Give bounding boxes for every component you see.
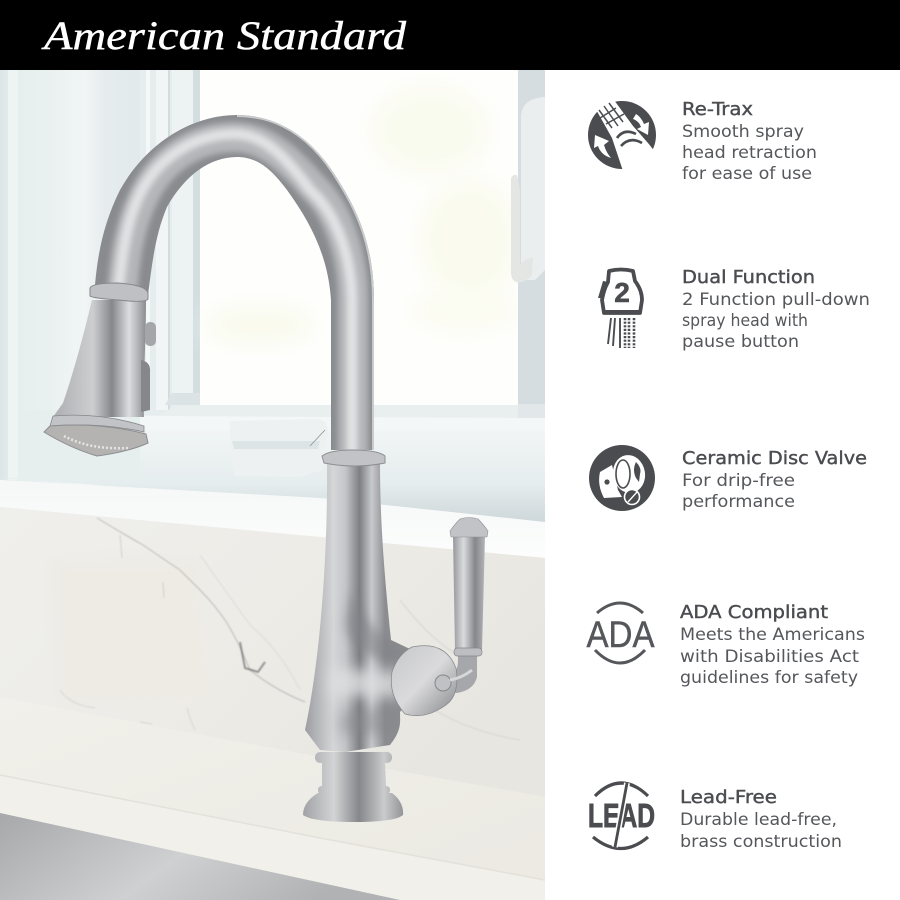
lower band <box>50 415 144 432</box>
text: Lead-Free: Durable lead-free, <box>680 810 837 830</box>
text: Dual Function: pause button <box>682 332 799 352</box>
text: Lead-Free: brass construction <box>680 832 842 852</box>
text: Re-Trax: for ease of use <box>682 164 812 184</box>
text: Re-Trax: Re-Trax <box>682 100 753 120</box>
countertop <box>0 697 545 900</box>
faucet body <box>300 450 488 760</box>
crank housing <box>230 419 328 477</box>
header: black brand bar <box>0 0 900 70</box>
icon: spray head with 2 <box>598 270 642 348</box>
faucet base <box>303 752 403 822</box>
window ledge <box>0 480 545 558</box>
right window jamb <box>518 70 545 432</box>
photo: kitchen window and countertop <box>0 70 545 900</box>
text: Re-Trax: Smooth spray <box>682 122 804 142</box>
icon: lead-free <box>588 783 655 848</box>
icon: spray head retraction <box>588 100 660 175</box>
icon: ceramic valve <box>589 445 655 511</box>
top collar <box>322 450 385 466</box>
text: ADA Compliant: Meets the Americans <box>680 625 865 645</box>
marble backsplash <box>0 507 545 797</box>
lower window panel <box>0 430 545 527</box>
spray head <box>44 283 156 456</box>
spray face <box>44 425 148 456</box>
icon: lead-free: LEAD <box>588 797 655 834</box>
text: ADA Compliant: with Disabilities Act <box>680 647 859 667</box>
icon: ADA <box>586 603 655 663</box>
feature: Re-Trax <box>588 100 817 184</box>
text: Re-Trax: head retraction <box>682 143 817 163</box>
text: ADA Compliant: ADA Compliant <box>680 603 828 623</box>
text: Re-Trax <box>682 100 817 184</box>
faucet <box>44 100 488 822</box>
pause switch <box>141 360 150 412</box>
stainless sink <box>0 813 400 900</box>
icon: spray head with 2: 2 <box>614 277 630 308</box>
window glass with blurred foliage <box>200 70 520 405</box>
text: ADA Compliant: guidelines for safety <box>680 668 858 688</box>
text: Dual Function: spray head with <box>682 311 808 331</box>
text: Ceramic Disc Valve: Ceramic Disc Valve <box>682 449 867 469</box>
text: Lead-Free <box>680 788 842 852</box>
text: Lead-Free: Lead-Free <box>680 788 777 808</box>
wall beside window <box>0 70 140 490</box>
window sill rails <box>140 393 545 432</box>
head collar <box>90 283 148 301</box>
text: Ceramic Disc Valve: For drip-free <box>682 471 795 491</box>
feature: Ceramic Disc Valve <box>589 445 867 512</box>
logo: American Standard: American Standard <box>41 13 407 58</box>
handle hub <box>391 646 457 716</box>
text: Dual Function: Dual Function <box>682 268 815 288</box>
marble veins <box>60 518 305 730</box>
left wall shading <box>18 410 140 480</box>
lever elbow <box>438 652 477 693</box>
window frame <box>140 70 202 415</box>
text: Dual Function <box>682 268 870 352</box>
text: Ceramic Disc Valve <box>682 449 867 512</box>
feature: Lead-Free <box>588 783 842 852</box>
text: ADA Compliant <box>680 603 865 688</box>
spray button <box>145 322 156 346</box>
left window frame strip <box>8 70 18 480</box>
window crank handle <box>511 97 545 282</box>
feature: Dual Function <box>598 268 870 352</box>
text: Dual Function: 2 Function pull-down <box>682 290 870 310</box>
text: Ceramic Disc Valve: performance <box>682 492 795 512</box>
faucet spout <box>95 115 374 450</box>
lever <box>453 536 485 650</box>
feature: ADA Compliant <box>586 603 865 688</box>
icon: ADA: ADA <box>586 614 655 655</box>
